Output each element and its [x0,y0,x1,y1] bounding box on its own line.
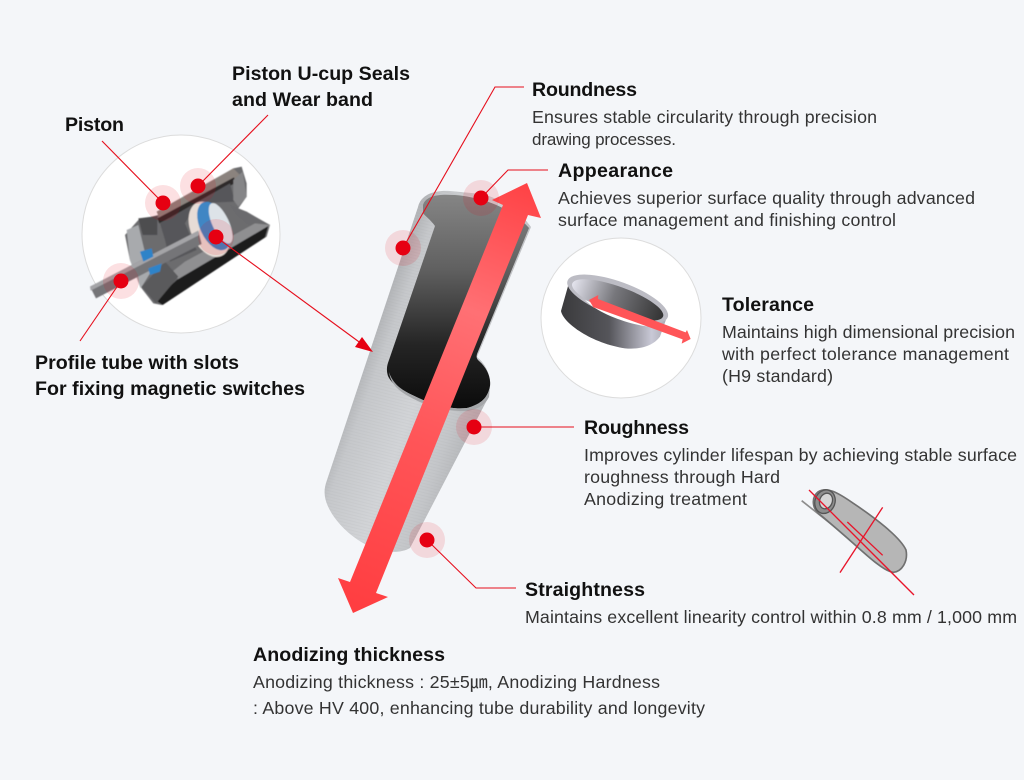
callout: appearance [463,160,975,230]
text: straightness [525,579,1017,627]
text: anodizing thickness [253,644,705,718]
text: roughness: Improves cylinder lifespan by achieving stable surface [584,445,1017,465]
callout: profile tube with slots [35,263,305,400]
label: profile tube: Profile tube with slots [35,352,239,374]
text: appearance: Appearance [558,160,673,182]
text: appearance: Achieves superior surface quality through advanced [558,188,975,208]
text: appearance: surface management and finishing control [558,210,896,230]
text: anodizing thickness: Anodizing thickness : 25±5㎛, Anodizing Hardness [253,672,660,693]
callout: straightness [409,522,1017,627]
icon: cylinder tube [325,191,531,552]
callout: roundness [385,79,877,266]
icon: straightness tube diagram [802,487,914,595]
label: profile tube: For fixing magnetic switches [35,378,305,400]
text: roughness: Anodizing treatment [584,489,747,509]
text: roundness: Roundness [532,79,637,101]
text: tolerance [721,294,1015,386]
callout: piston u-cup seals and wear band [180,63,410,204]
panel: piston illustration circle [82,135,280,333]
text: tolerance: Tolerance [722,294,814,316]
text: anodizing thickness: Anodizing thickness [253,644,445,666]
text: roughness [584,417,1017,509]
label: piston u-cup seals: and Wear band [232,89,373,111]
callout: piston [65,114,181,221]
text: appearance [558,160,975,230]
label: piston u-cup seals [232,63,410,111]
text: anodizing thickness: : Above HV 400, enhancing tube durability and longevity [253,698,705,718]
text: straightness: Straightness [525,579,645,601]
text: roughness: roughness through Hard [584,467,780,487]
text: tolerance: Maintains high dimensional precision [722,322,1015,342]
icon: ring with diameter arrow [561,264,691,349]
text: tolerance: (H9 standard) [722,366,833,386]
text: roundness [532,79,877,149]
text: tolerance: with perfect tolerance management [721,344,1009,364]
icon: cutaway piston cylinder [90,167,270,305]
arrow: piston pointer to tube [198,219,373,352]
text: straightness: Maintains excellent linearity control within 0.8 mm / 1,000 mm [525,607,1017,627]
callout: roughness [456,409,1017,509]
text: roundness: drawing processes. [532,130,676,149]
label: profile tube [35,352,305,400]
label: piston: Piston [65,114,124,136]
label: piston u-cup seals: Piston U-cup Seals [232,63,410,85]
text: roundness: Ensures stable circularity through precision [532,107,877,127]
arrow: anodizing thickness double arrow [338,183,541,613]
panel: tolerance ring circle [541,238,701,398]
text: roughness: Roughness [584,417,689,439]
